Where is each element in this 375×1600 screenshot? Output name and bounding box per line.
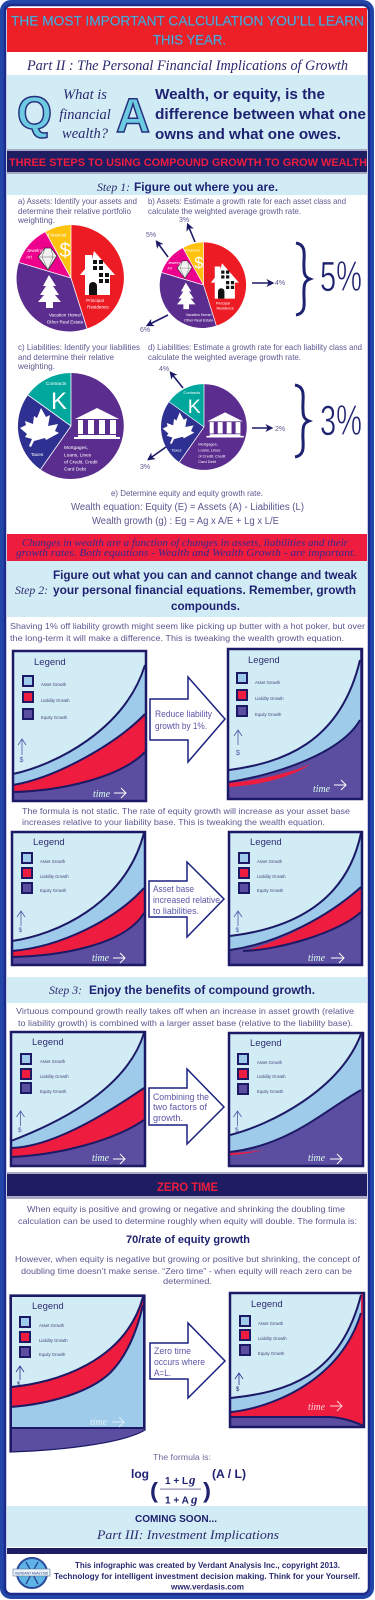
pie chart: asset growth rates: Residence (217, 307, 234, 311)
text: formula not static: The formula is not static. The rate of equity growth will increase as your asset base (22, 806, 350, 816)
pie chart: liability growth rates: Contracts (184, 390, 200, 395)
pie chart: liabilities weighting: Mortgages, (64, 445, 88, 451)
chart: larger asset base (229, 832, 362, 965)
legend: Legend (250, 837, 282, 848)
legend: Asset Growth (40, 1059, 66, 1064)
footer credits (54, 1561, 360, 1592)
heading: step 2: your personal financial equations. Remember, growth (53, 583, 356, 597)
text: e) equity equations: Wealth growth (g) : Eg = Ag x A/E + Lg x L/E (92, 516, 279, 527)
arrows: liability growth rates: 4% (159, 366, 169, 373)
icon: Q: Q (17, 87, 52, 139)
text: d) liabilities (148, 342, 362, 362)
formula: zero time: g (188, 1472, 196, 1487)
footer credits: www.verdasis.com (170, 1582, 244, 1592)
arrows: asset growth rates: 4% (275, 280, 285, 287)
arrows: liability growth rates: 2% (275, 426, 285, 433)
text: d) liabilities: d) Liabilities: Estimate a growth rate for each liability class and (148, 342, 362, 352)
title banner: THE MOST IMPORTANT CALCULATION YOU’LL LEARN (11, 12, 364, 28)
arrow: combining the two factors: Combining the (153, 1092, 209, 1103)
text: a) assets: weighting. (17, 215, 55, 225)
title banner: THIS YEAR. (153, 32, 226, 48)
icon: maple leaf (20, 408, 59, 447)
legend: Equity Growth (41, 715, 68, 720)
heading: three steps: THREE STEPS TO USING COMPOUND GROWTH TO GROW WEALTH (9, 157, 367, 169)
legend (20, 1301, 68, 1357)
legend: Liability Growth (255, 696, 284, 701)
legend: Legend (32, 1301, 64, 1312)
heading: zero time (7, 1172, 367, 1199)
legend: Legend (32, 1037, 64, 1048)
text: doubling time: When equity is positive and growing or negative and shrinking the doubling time (27, 1204, 345, 1214)
icon: verdant analysis logo (13, 1558, 50, 1588)
arrows: liability growth rates (140, 366, 285, 471)
legend (239, 837, 286, 893)
answer text (155, 86, 366, 143)
legend: Asset Growth (257, 859, 283, 864)
formula: zero time: g (190, 1492, 198, 1506)
text: b) assets (148, 196, 346, 216)
question text: What is (63, 87, 107, 103)
arrow: asset base increased: to liabilities. (153, 906, 199, 917)
pie chart: assets weighting: Other Real Estate (47, 320, 84, 324)
legend: Equity Growth (257, 888, 284, 893)
pie chart: asset growth rates: Principal (216, 301, 230, 305)
legend: Legend (34, 657, 66, 668)
legend: Equity Growth (40, 888, 67, 893)
legend: Liability Growth (41, 698, 70, 703)
chart: before reducing liability growth (13, 651, 146, 801)
pie chart: assets weighting: Financial (48, 232, 66, 238)
arrow: reduce liability growth: Reduce liability (155, 709, 212, 720)
text: virtuous compound growth (16, 1006, 354, 1028)
question text (59, 87, 111, 142)
pie chart: liability growth rates: of Credit, Credit (198, 453, 226, 458)
chart: before combined growth: $ (18, 1127, 22, 1134)
icon: tree (38, 275, 61, 308)
panel: coming soon (7, 1506, 367, 1547)
legend (240, 1299, 287, 1356)
formula: zero time: ( (150, 1478, 159, 1503)
legend (21, 1037, 69, 1094)
text: c) liabilities: c) Liabilities: Identify your liabilities (18, 342, 140, 352)
footer credits: This infographic was created by Verdant Analysis Inc., copyright 2013. (75, 1561, 340, 1570)
brace and 3% (295, 385, 362, 457)
text: doubling time (18, 1204, 357, 1226)
arrow: reduce liability growth (150, 677, 225, 762)
icon: bank (74, 408, 120, 439)
legend: Asset Growth (257, 1060, 283, 1065)
pie chart: asset growth rates: Art (167, 266, 172, 270)
pie chart: liabilities weighting: of Credit, Credit (64, 460, 98, 466)
icon: K: K (51, 388, 67, 415)
pie chart: assets weighting: Vacation Home/ (49, 312, 82, 318)
text: zero time explanation (15, 1254, 361, 1286)
pie chart: asset growth rates (160, 242, 246, 328)
text: virtuous compound growth: to liability growth) is combined with a larger asset base (relative to the liability base). (18, 1018, 353, 1028)
legend: Equity Growth (39, 1352, 66, 1357)
heading: step 3: Enjoy the benefits of compound growth. (89, 983, 315, 997)
text: a) assets: a) Assets: Identify your assets and (18, 196, 137, 206)
arrows: liability growth rates: 3% (140, 464, 150, 471)
legend: Legend (33, 837, 65, 848)
legend: Liability Growth (258, 1336, 287, 1341)
callout: changes in wealth (7, 534, 367, 561)
legend: Legend (248, 655, 280, 666)
pie chart: assets weighting: Principal (86, 298, 104, 303)
chart: after reducing liability growth: $ (236, 750, 240, 757)
legend: Liability Growth (40, 1074, 69, 1079)
formula: zero time: The formula is: (153, 1453, 211, 1462)
text: shaving 1%: Shaving 1% off liability growth might seem like picking up butter with a hot poker, but over (10, 621, 365, 631)
icon: A: A (116, 90, 150, 143)
arrow: combining the two factors: two factors of (153, 1102, 207, 1113)
pie chart: liability growth rates: Mortgages, (198, 442, 218, 447)
chart: before combined growth (11, 1032, 145, 1166)
panel: coming soon: COMING SOON... (135, 1514, 217, 1525)
title banner (7, 8, 367, 52)
chart: larger asset base: time (308, 953, 326, 964)
arrow: asset base increased: increased relative (153, 895, 220, 906)
chart: before reducing liability growth: time (93, 789, 111, 800)
pie chart: asset growth rates: Financial (185, 249, 200, 253)
text: formula not static: increases relative to your liability base. This is tweaking the wealth equation. (22, 817, 325, 827)
pie chart: liabilities weighting (18, 373, 124, 479)
heading: step 3 (7, 977, 367, 1003)
text: e) equity equations: Wealth equation: Equity (E) = Assets (A) - Liabilities (L) (71, 502, 304, 513)
pie chart: asset growth rates: Jewelry/ (168, 261, 182, 265)
text: c) liabilities (17, 342, 140, 371)
answer text: owns and what one owes. (155, 126, 341, 143)
arrow: asset base increased: Asset base (153, 884, 194, 895)
text: zero time explanation: determined. (163, 1276, 212, 1286)
text: b) assets: b) Assets: Estimate a growth rate for each asset class and (148, 196, 346, 206)
arrows: asset growth rates: 5% (146, 232, 156, 239)
pie chart: asset growth rates: $ (194, 254, 203, 272)
chart: before zero time (10, 1295, 145, 1452)
pie chart: liability growth rates: Taxes (171, 447, 182, 452)
text: a) assets: determine their relative portfolio (18, 206, 131, 216)
icon: dollar: $ (59, 240, 71, 262)
pie chart: liability growth rates: Card Debt (198, 459, 217, 464)
chart: before combined growth: time (92, 1153, 110, 1164)
arrow: zero time occurs: occurs where (154, 1357, 205, 1368)
icon: diamond (38, 248, 57, 270)
callout: changes in wealth: growth rates. Both equations - Wealth and Wealth Growth - are important. (16, 547, 356, 559)
answer text: difference between what one (155, 106, 366, 123)
heading: step 1 (7, 174, 367, 195)
subtitle: Part II : The Personal Financial Implications of Growth (26, 58, 348, 74)
chart: after zero time: time (308, 1402, 326, 1413)
formula: zero time: 1 + L (165, 1476, 188, 1487)
legend: Equity Growth (255, 712, 282, 717)
callout: changes in wealth: Changes in wealth are a function of changes in assets, liabilities and their (22, 537, 349, 549)
panel: coming soon: Part III: Investment Implications (96, 1527, 279, 1542)
legend (238, 1038, 286, 1094)
legend: Legend (251, 1299, 283, 1310)
pie chart: assets weighting: Residence (87, 304, 109, 310)
pie chart: assets weighting (17, 225, 124, 331)
pie chart: asset growth rates: Other Real Estate (184, 319, 213, 323)
legend: Liability Growth (257, 1074, 286, 1079)
question text: financial (59, 107, 111, 123)
pie chart: liability growth rates: Loans, Lines (198, 448, 220, 453)
pie chart: liabilities weighting: Card Debt (64, 466, 87, 472)
arrow: combining the two factors: growth. (153, 1113, 183, 1124)
brace and 5% (296, 243, 362, 315)
heading: step 2: Figure out what you can and cannot change and tweak (53, 568, 357, 582)
legend: Asset Growth (39, 1323, 65, 1328)
arrow: zero time occurs (150, 1323, 225, 1398)
answer text: Wealth, or equity, is the (155, 86, 325, 103)
chart: before reducing liability growth: $ (20, 757, 24, 764)
arrow: combining the two factors (149, 1069, 224, 1144)
text: zero time explanation: doubling time doesn’t make sense. “Zero time” - when equity will reach zero can be (21, 1266, 352, 1276)
legend: Legend (250, 1038, 282, 1049)
text: a) assets (17, 196, 137, 225)
chart: after zero time: $ (236, 1387, 240, 1393)
icon: verdant analysis logo: VERDANT ANALYSIS (15, 1570, 48, 1576)
arrows: asset growth rates (140, 217, 285, 334)
panel: question and answer (7, 75, 367, 149)
legend: Equity Growth (258, 1351, 285, 1356)
chart: before zero time: $ (17, 1382, 21, 1388)
heading: zero time: ZERO TIME (157, 1180, 218, 1194)
chart: after zero time (230, 1293, 364, 1427)
legend: Asset Growth (40, 859, 66, 864)
text: virtuous compound growth: Virtuous compound growth really takes off when an increase in asset growth (relative (16, 1006, 354, 1016)
heading: step 2 (7, 561, 367, 617)
formula: zero time (131, 1453, 246, 1506)
arrows: asset growth rates: 3% (179, 217, 189, 224)
text: formula not static (22, 806, 350, 827)
pie chart: liabilities weighting: Taxes (31, 452, 44, 458)
arrows: asset growth rates: 6% (140, 327, 150, 334)
text: zero time explanation: However, when equity is negative but growing or positive but shrinking, the concept of (15, 1254, 361, 1264)
text: d) liabilities: calculate the weighted average growth rate. (148, 352, 301, 362)
pie chart: asset growth rates: Vacation Home/ (186, 313, 213, 317)
pie chart: liability growth rates: K (188, 396, 201, 418)
formula: zero time: log (131, 1467, 149, 1481)
arrow: reduce liability growth: growth by 1%. (155, 721, 207, 732)
text: e) equity equations (71, 488, 304, 527)
chart: after combined growth (229, 1033, 363, 1166)
legend: Asset Growth (255, 680, 281, 685)
legend: Equity Growth (257, 1089, 284, 1094)
heading: three steps (7, 149, 367, 175)
question text: wealth? (62, 126, 109, 142)
legend: Liability Growth (257, 874, 286, 879)
heading: step 1: Figure out where you are. (134, 182, 278, 194)
legend: Asset Growth (258, 1321, 284, 1326)
heading: step 1: Step 1: (97, 180, 130, 194)
text: c) liabilities: and determine their relative (18, 352, 114, 362)
heading: step 2: Step 2: (15, 583, 48, 597)
pie chart: assets weighting: Art (26, 254, 33, 260)
chart: larger asset base: $ (236, 927, 240, 934)
legend: Liability Growth (39, 1338, 68, 1343)
arrow: zero time occurs: A=L. (154, 1368, 171, 1379)
chart: before zero time: time (90, 1417, 108, 1428)
arrow: asset base increased (149, 862, 224, 937)
chart: smaller asset base (12, 832, 145, 965)
legend: Asset Growth (41, 682, 67, 687)
formula: zero time: 1 + A (165, 1496, 189, 1506)
chart: after reducing liability growth: time (313, 784, 331, 795)
text: shaving 1% (10, 621, 365, 643)
pie chart: liabilities weighting: Loans, Lines (64, 452, 92, 458)
pie chart: liabilities weighting: Contracts (46, 381, 67, 387)
legend (22, 837, 69, 893)
text: b) assets: calculate the weighted average growth rate. (148, 206, 301, 216)
text: shaving 1%: the long-term it will make a difference. This is tweaking the wealth growth equation. (10, 633, 344, 643)
formula: zero time: ) (203, 1478, 211, 1503)
pie chart: liability growth rates (161, 384, 247, 470)
text: e) equity equations: e) Determine equity and equity growth rate. (111, 488, 263, 498)
formula: zero time: (A / L) (212, 1467, 246, 1481)
chart: after combined growth: time (308, 1153, 326, 1164)
chart: smaller asset base: time (92, 953, 110, 964)
chart: smaller asset base: $ (18, 927, 22, 934)
legend (23, 657, 70, 720)
icon: house (80, 251, 115, 295)
legend (237, 655, 284, 717)
text: c) liabilities: weighting. (17, 361, 55, 371)
legend: Equity Growth (40, 1089, 67, 1094)
chart: after combined growth: $ (235, 1127, 239, 1134)
footer credits: Technology for intelligent investment decision making. Think for your Yourself. (54, 1572, 360, 1581)
heading: step 2: compounds. (171, 599, 240, 613)
formula: 70 over rate: 70/rate of equity growth (126, 1234, 250, 1246)
heading: step 3: Step 3: (49, 983, 82, 997)
text: doubling time: calculation can be used to determine roughly when equity will double. The formula is: (18, 1216, 357, 1226)
chart: after reducing liability growth (228, 649, 362, 799)
legend: Liability Growth (40, 874, 69, 879)
pie chart: assets weighting: Jewelry/ (27, 248, 44, 253)
arrow: zero time occurs: Zero time (154, 1346, 191, 1357)
